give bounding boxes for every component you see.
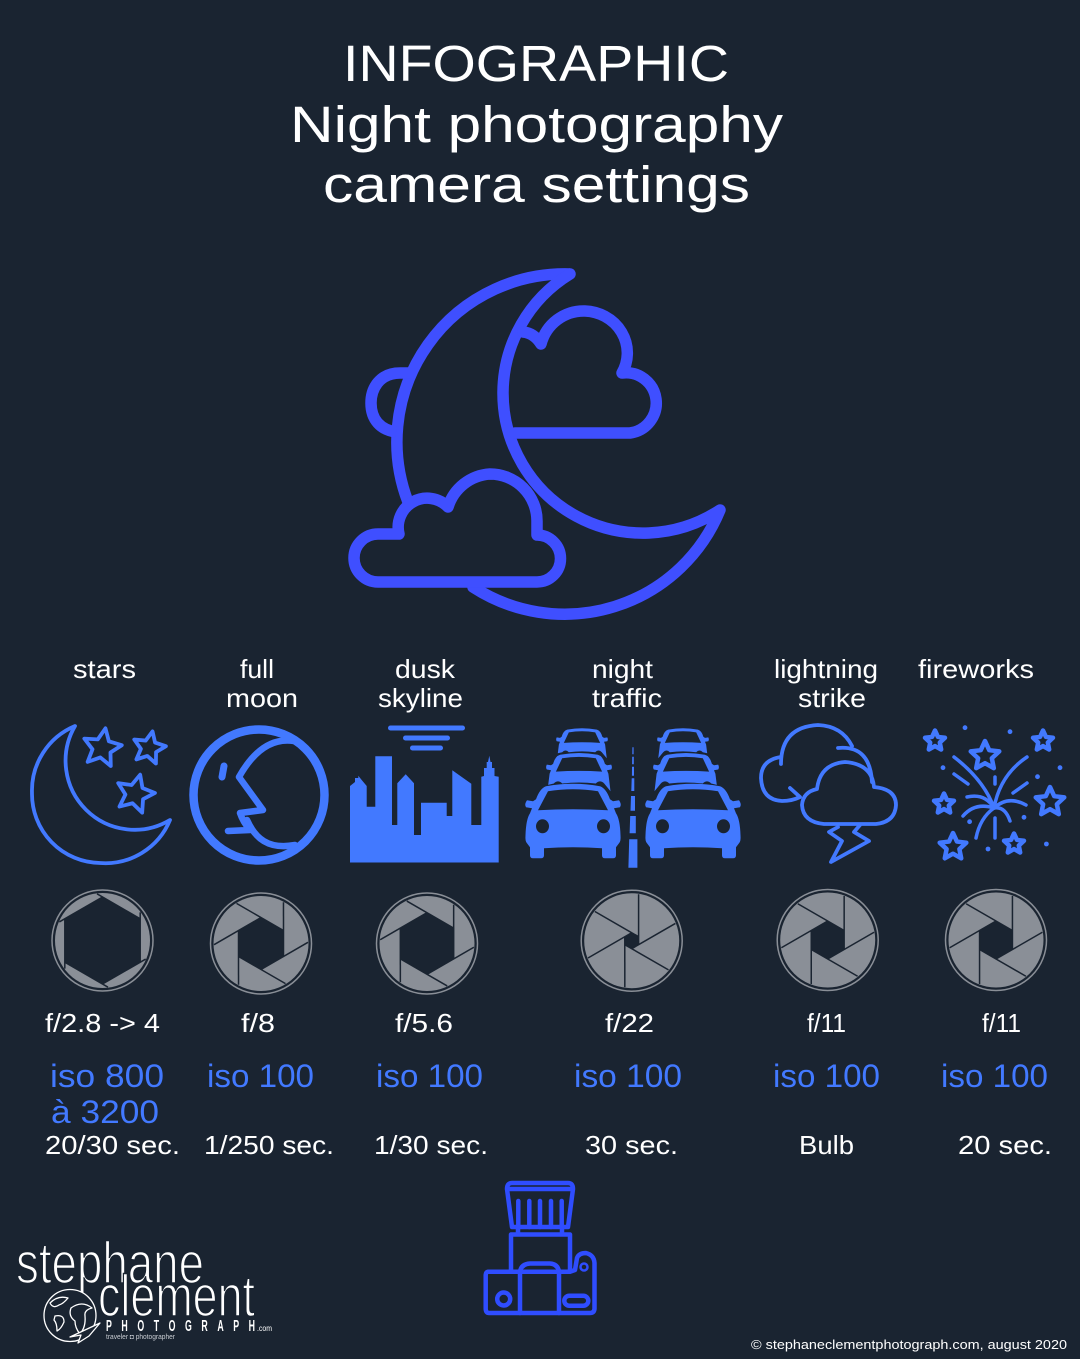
icon: camera <box>486 1183 594 1313</box>
labels: scene names: traffic <box>592 683 662 713</box>
aperture values: f/8 <box>241 1008 275 1038</box>
copyright footer: © stephaneclementphotograph.com, august 2020 <box>751 1337 1067 1352</box>
labels: scene names: moon <box>226 683 298 713</box>
shutter speed values: 1/30 sec. <box>374 1130 488 1160</box>
icon: lightning strike <box>761 725 896 862</box>
iso values: iso 100 <box>941 1058 1048 1094</box>
logo: clement <box>98 1264 255 1329</box>
iso values: iso 100 <box>773 1058 880 1094</box>
labels: scene names: skyline <box>378 683 463 713</box>
icon: aperture f/5.6 <box>376 893 478 994</box>
labels: scene names: strike <box>798 683 866 713</box>
shutter speed values: 20 sec. <box>958 1130 1052 1160</box>
title <box>290 35 784 213</box>
aperture values: f/2.8 -> 4 <box>45 1008 160 1038</box>
iso values: iso 100 <box>207 1058 314 1094</box>
icon: dusk skyline <box>350 726 499 862</box>
labels: scene names: night <box>592 654 654 684</box>
labels: scene names: lightning <box>774 654 878 684</box>
logo: PHOTOGRAPH <box>106 1316 255 1335</box>
logo: traveler ◘ photographer <box>106 1334 176 1341</box>
aperture values: f/5.6 <box>395 1008 453 1038</box>
labels: scene names: fireworks <box>918 654 1034 684</box>
iso values: à 3200 <box>51 1094 159 1130</box>
title: INFOGRAPHIC <box>343 35 729 92</box>
title: Night photography <box>290 96 784 153</box>
labels: scene names: dusk <box>395 654 456 684</box>
shutter speed values: 1/250 sec. <box>204 1130 334 1160</box>
iso values: iso 100 <box>574 1058 682 1094</box>
icon: aperture f/22 <box>581 890 682 991</box>
labels: scene names: full <box>240 654 274 684</box>
icon: globe with plane <box>44 1290 100 1343</box>
iso values <box>50 1058 1048 1130</box>
logo: .com <box>257 1324 272 1333</box>
icon: aperture f/11 fireworks <box>946 890 1046 990</box>
icon: aperture f/2.8 <box>43 885 162 996</box>
icon: full moon <box>194 730 324 860</box>
aperture values: f/22 <box>605 1008 654 1038</box>
labels: scene names <box>73 654 1034 713</box>
labels: scene names: stars <box>73 654 136 684</box>
shutter speed values: Bulb <box>799 1130 854 1160</box>
icon: moon and clouds <box>354 274 720 614</box>
shutter speed values: 30 sec. <box>585 1130 678 1160</box>
aperture values <box>45 1008 1021 1038</box>
icon: aperture f/11 lightning <box>777 890 878 990</box>
logo <box>16 1231 272 1343</box>
aperture values: f/11 <box>807 1008 846 1038</box>
icon: fireworks <box>925 725 1064 858</box>
shutter speed values: 20/30 sec. <box>45 1130 180 1160</box>
aperture values: f/11 <box>982 1008 1021 1038</box>
iso values: iso 100 <box>376 1058 483 1094</box>
icon: stars <box>32 725 170 863</box>
logo: stephane <box>16 1231 204 1296</box>
icon: night traffic <box>525 728 741 868</box>
icon: aperture f/8 <box>210 893 312 994</box>
shutter speed values <box>45 1130 1052 1160</box>
iso values: iso 800 <box>50 1058 164 1094</box>
title: camera settings <box>323 156 750 213</box>
